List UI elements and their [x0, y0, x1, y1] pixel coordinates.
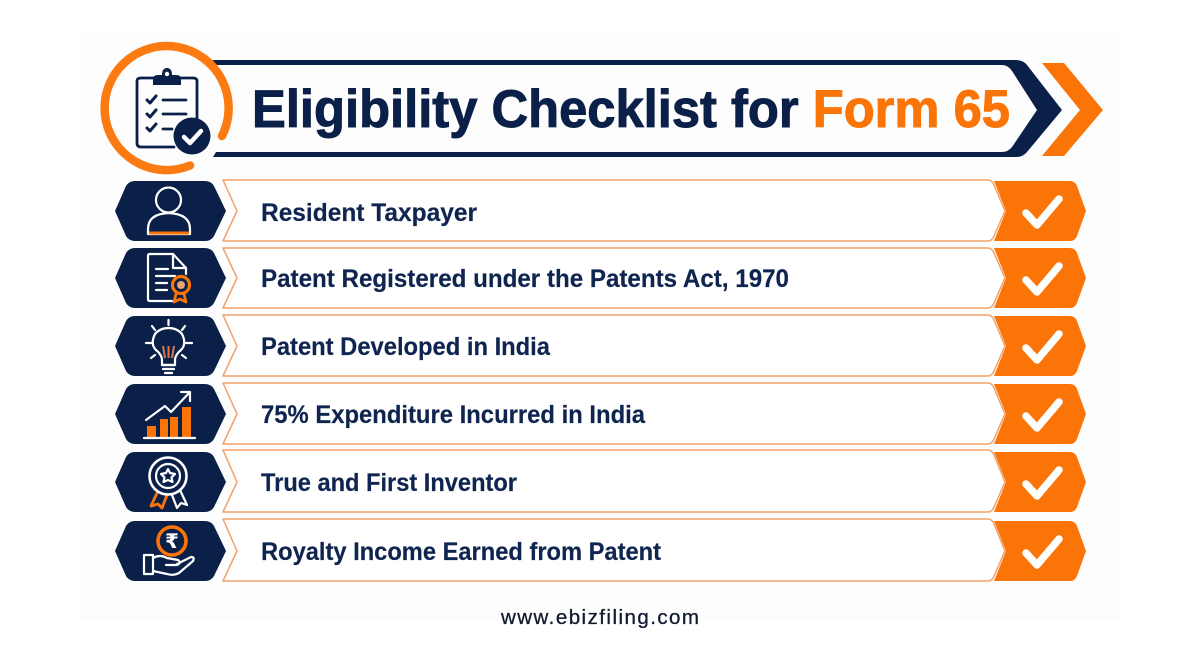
clipboard	[137, 78, 197, 147]
label: Patent Developed in India	[261, 333, 551, 361]
footer website: www.ebizfiling.com	[500, 606, 699, 629]
row 6: royalty income	[115, 519, 1086, 581]
label: Patent Registered under the Patents Act, 1970	[261, 265, 789, 293]
icon: growth chart	[115, 384, 226, 444]
check tag	[994, 248, 1086, 308]
row 1: resident taxpayer	[115, 180, 1086, 241]
text panel	[223, 383, 1005, 444]
text panel	[223, 315, 1005, 376]
label: Resident Taxpayer	[261, 199, 477, 227]
icon: light bulb	[115, 316, 226, 376]
text panel	[223, 519, 1005, 581]
icon: clipboard in orange ring	[105, 46, 229, 170]
heading: Eligibility Checklist for Form 65	[252, 80, 1010, 139]
banner chevron	[1042, 63, 1103, 156]
icon: certified document	[115, 248, 226, 308]
check badge	[174, 118, 210, 154]
orange ring	[105, 46, 229, 170]
check tag	[994, 181, 1086, 241]
icon: person	[115, 181, 226, 241]
label: True and First Inventor	[261, 469, 517, 497]
label: Royalty Income Earned from Patent	[261, 538, 662, 566]
check tag	[994, 384, 1086, 444]
banner outline	[213, 60, 1062, 157]
check tag	[994, 521, 1086, 581]
text panel	[223, 180, 1005, 241]
icon: rupee coin over hand: ₹	[165, 529, 179, 553]
row 4: expenditure	[115, 383, 1086, 444]
row 5: true and first inventor	[115, 450, 1086, 512]
title banner	[213, 60, 1103, 157]
text panel	[223, 248, 1005, 308]
text panel	[223, 450, 1005, 512]
icon: award rosette	[115, 452, 226, 512]
check tag	[994, 316, 1086, 376]
label: 75% Expenditure Incurred in India	[261, 401, 646, 429]
icon: rupee coin over hand	[115, 521, 226, 581]
check tag	[994, 452, 1086, 512]
row 2: patent registered	[115, 248, 1086, 308]
row 3: patent developed	[115, 315, 1086, 376]
